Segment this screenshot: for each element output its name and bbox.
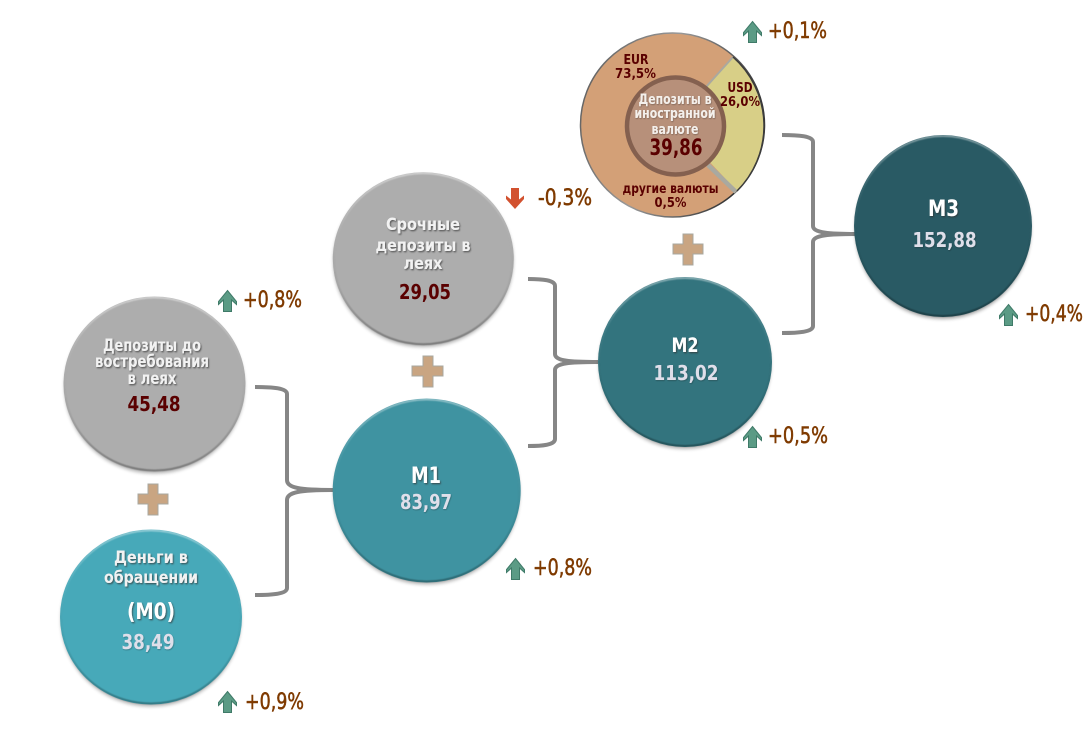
circle: M0 currency in circulation: 38,49 bbox=[122, 630, 174, 654]
donut: foreign currency deposits: USD bbox=[728, 81, 753, 96]
plus: term deposits + M1 bbox=[412, 356, 443, 387]
donut: foreign currency deposits: 39,86 bbox=[650, 136, 702, 161]
circle: M2: 113,02 bbox=[654, 361, 718, 385]
donut: foreign currency deposits: 73,5% bbox=[615, 67, 656, 82]
circle: term deposits in lei bbox=[333, 172, 514, 347]
change: demand deposits +0,8%: +0,8% bbox=[243, 287, 302, 313]
circle: M1: 83,97 bbox=[400, 490, 452, 514]
brace: M2 and foreign deposits to M3 bbox=[782, 135, 856, 333]
donut centre bbox=[627, 78, 724, 174]
donut: foreign currency deposits: 0,5% bbox=[654, 196, 686, 211]
change: demand deposits +0,8% bbox=[218, 287, 302, 313]
donut: foreign currency deposits: EUR bbox=[624, 53, 648, 68]
circle: term deposits in lei: 29,05 bbox=[399, 280, 451, 304]
change: M1 +0,8% bbox=[506, 555, 592, 581]
circle: M1 bbox=[333, 398, 521, 584]
donut: foreign currency deposits: валюте bbox=[652, 122, 698, 138]
donut: foreign currency deposits: другие валюты bbox=[622, 182, 718, 197]
change: M0 +0,9%: +0,9% bbox=[245, 689, 304, 715]
brace: M0 and demand deposits to M1 bbox=[255, 387, 333, 595]
circle: M0 currency in circulation bbox=[60, 530, 242, 706]
change: foreign deposits +0,1%: +0,1% bbox=[768, 18, 827, 44]
change: M1 +0,8%: +0,8% bbox=[533, 555, 592, 581]
change: foreign deposits +0,1% bbox=[744, 18, 827, 44]
circle: M3: 152,88 bbox=[912, 228, 976, 252]
circle: M2: М2 bbox=[672, 334, 698, 357]
circle: demand deposits in lei bbox=[64, 296, 246, 474]
brace: M1 and term deposits to M2 bbox=[528, 279, 598, 446]
circle: M0 currency in circulation: Деньги в bbox=[114, 548, 188, 567]
circle: demand deposits in lei: 45,48 bbox=[128, 392, 180, 416]
change: term deposits -0,3%: -0,3% bbox=[538, 185, 592, 211]
plus: demand deposits + M0 bbox=[138, 484, 168, 515]
circle: M2 bbox=[598, 277, 772, 449]
change: M3 +0,4% bbox=[1000, 301, 1083, 327]
circle: term deposits in lei: депозиты в bbox=[376, 236, 470, 255]
circle: M3: М3 bbox=[928, 197, 959, 222]
slice: USD bbox=[675, 57, 764, 191]
circle: M0 currency in circulation: (М0) bbox=[127, 600, 175, 625]
donut: foreign currency deposits: Депозиты в bbox=[638, 92, 712, 108]
slice: EUR and other currencies bbox=[580, 33, 764, 217]
circle: M0 currency in circulation: обращении bbox=[104, 568, 198, 587]
donut: foreign currency deposits bbox=[580, 33, 764, 217]
circle: demand deposits in lei: востребования bbox=[95, 352, 209, 371]
circle: M1: М1 bbox=[411, 464, 441, 489]
circle: demand deposits in lei: в леях bbox=[128, 369, 177, 388]
donut: foreign currency deposits: иностранной bbox=[634, 106, 716, 122]
slice border: upper separator bbox=[705, 57, 733, 88]
donut: foreign currency deposits: 26,0% bbox=[720, 95, 760, 110]
circle: term deposits in lei: леях bbox=[404, 254, 443, 273]
right rim bbox=[733, 57, 764, 191]
circle: M3 bbox=[854, 135, 1032, 319]
circle: term deposits in lei: Срочные bbox=[386, 215, 460, 234]
change: M0 +0,9% bbox=[218, 689, 304, 715]
change: term deposits -0,3% bbox=[506, 185, 592, 211]
plus: foreign deposits + M2 bbox=[673, 234, 703, 265]
change: M2 +0,5%: +0,5% bbox=[768, 423, 828, 449]
change: M2 +0,5% bbox=[744, 423, 828, 449]
circle: demand deposits in lei: Депозиты до bbox=[103, 336, 201, 355]
slice: other currencies separator bbox=[708, 165, 736, 192]
